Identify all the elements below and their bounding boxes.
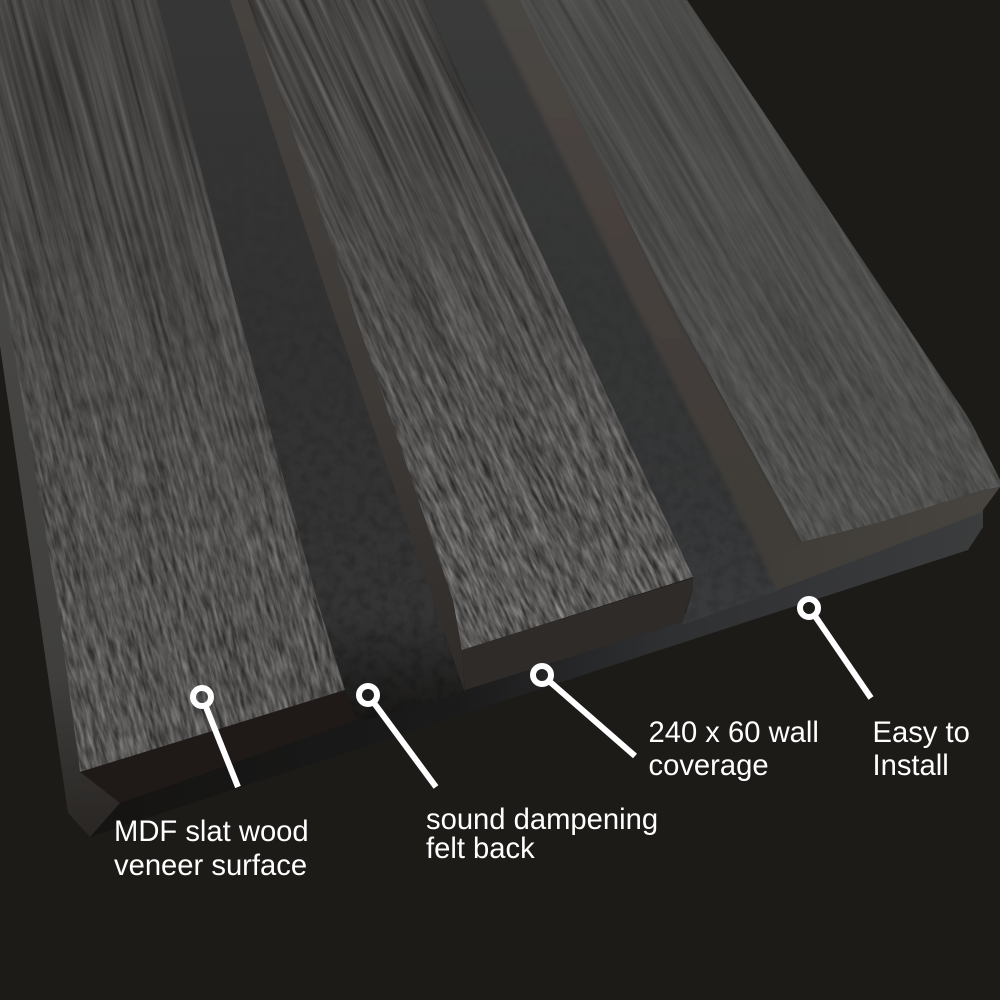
label text: felt back [426, 833, 535, 865]
label text: veneer surface [114, 850, 307, 882]
label text: Easy to [872, 717, 970, 749]
slat three veneer face [520, 0, 1000, 542]
left bevel edge [0, 265, 120, 837]
marker ring and leader line [359, 686, 436, 787]
callout: Easy to Install [800, 599, 970, 782]
slat wall one [230, 0, 465, 693]
label text: MDF slat wood [114, 816, 309, 848]
felt channel one [157, 0, 462, 686]
marker ring and leader line [193, 688, 238, 787]
marker ring and leader line [800, 599, 871, 698]
marker ring and leader line [533, 666, 635, 756]
slat one end face [80, 690, 357, 803]
callout: sound dampening felt back [359, 686, 658, 865]
label text: 240 x 60 wall [648, 717, 819, 749]
callout: MDF slat wood veneer surface [114, 688, 309, 882]
panel base strip [68, 505, 983, 837]
label text: coverage [648, 750, 769, 782]
label text: Install [872, 750, 949, 782]
slat one veneer face [0, 0, 355, 777]
slat two veneer face [248, 0, 693, 650]
felt channel two [424, 0, 802, 624]
slat three end face [768, 487, 1000, 590]
label text: sound dampening [426, 804, 658, 836]
slat two end face [462, 578, 693, 690]
slat wall two [479, 0, 802, 590]
callout: 240 x 60 wall coverage [533, 666, 819, 782]
